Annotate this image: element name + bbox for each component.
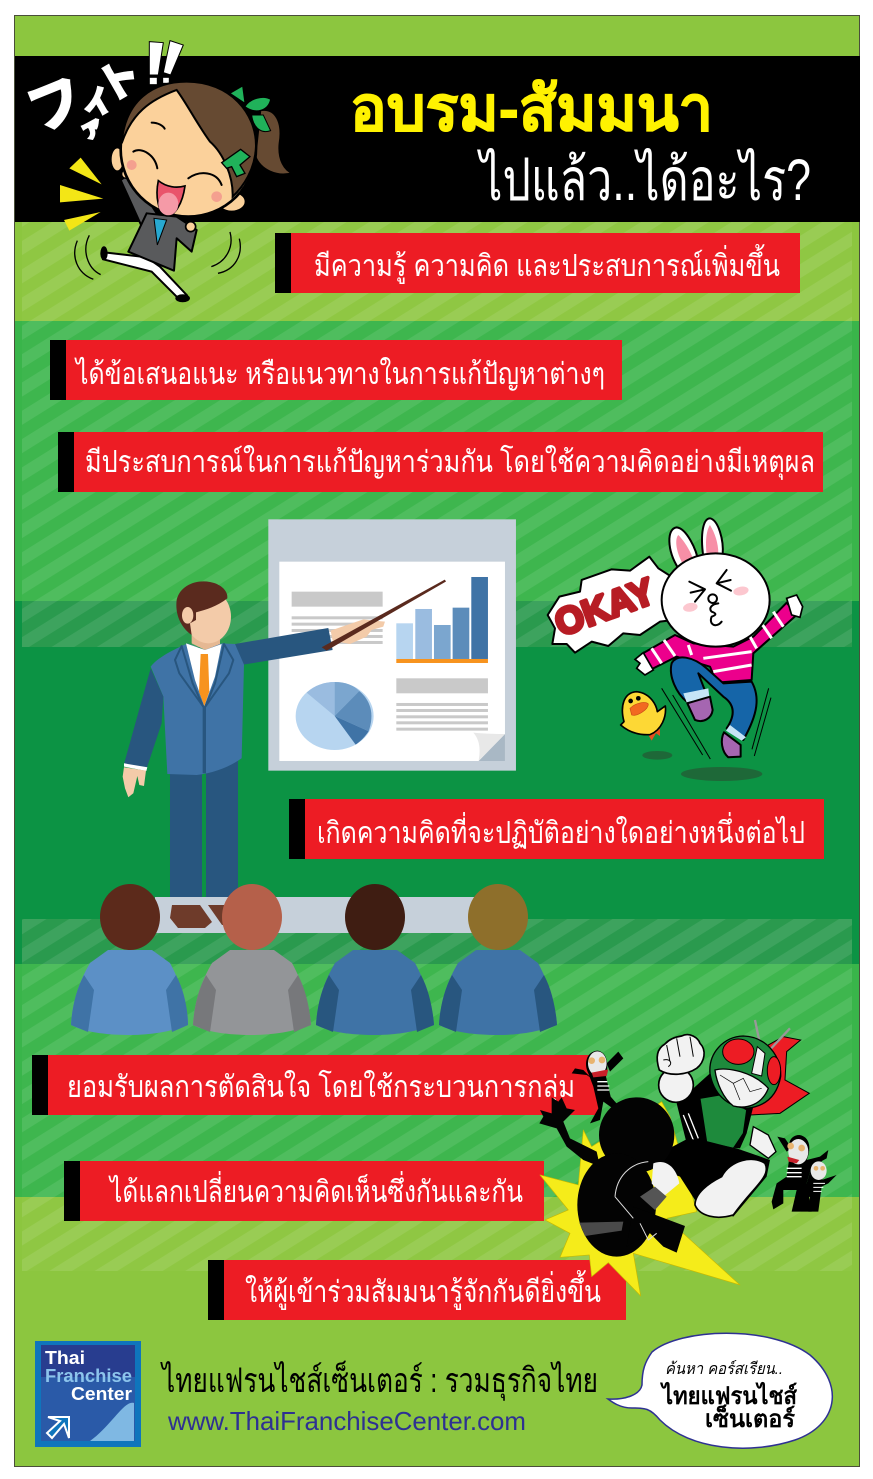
presenter shoes [170, 905, 236, 928]
henchmen right [772, 1135, 837, 1212]
katakana shout: イ [72, 75, 120, 128]
page curl [479, 734, 505, 761]
pie chart [296, 682, 374, 750]
speech bubble: ค้นหา คอร์สเรียน.. [665, 1359, 783, 1378]
footer website: www.ThaiFranchiseCenter.com [167, 1406, 526, 1436]
okay bubble [548, 557, 677, 653]
face [133, 123, 222, 185]
right text lines [396, 678, 488, 731]
helmet [710, 1036, 781, 1108]
illustration: cheering girl [13, 41, 293, 302]
stage and audience [71, 884, 557, 1035]
hair bow [230, 86, 271, 132]
bunny face [689, 570, 731, 625]
board frame [268, 519, 516, 771]
yellow chick [621, 692, 666, 741]
audience member 4 [439, 884, 557, 1035]
speech bubble: เซ็นเตอร์ [705, 1404, 795, 1433]
hero kick fight scene [539, 1020, 837, 1296]
enemy details [579, 1162, 679, 1240]
presenter body [151, 643, 244, 775]
kicking hero [653, 1020, 809, 1217]
presenter head [192, 630, 220, 650]
footer logo: Center [71, 1384, 132, 1404]
board sheet [279, 562, 505, 761]
left text lines [292, 592, 383, 644]
speech bubble: ไทยแฟรนไชส์ [659, 1381, 797, 1410]
small henchman top [572, 1051, 623, 1123]
legs [653, 1138, 770, 1217]
red scarf [723, 1037, 809, 1115]
footer logo: Franchise [45, 1366, 132, 1386]
bunny head [662, 553, 770, 647]
exclamation marks [149, 41, 183, 85]
katakana shout: ト [84, 41, 150, 114]
banner 6: ได้แลกเปลี่ยนความคิดเห็นซึ่งกันและกัน [108, 1171, 523, 1209]
motion arcs [75, 232, 240, 279]
arms and sweater [642, 603, 797, 683]
torso [677, 1073, 753, 1148]
ponytail [255, 110, 293, 175]
banner 1 [275, 233, 800, 293]
banner 5: ยอมรับผลการตัดสินใจ โดยใช้กระบวนการกลุ่ม [67, 1069, 575, 1106]
katakana shout: ァ [72, 105, 109, 146]
audience member 2 [193, 884, 311, 1035]
title: อบรม-สัมมนา [350, 75, 713, 144]
burst lines [60, 158, 103, 231]
audience member 3 [316, 884, 434, 1035]
okay lettering: OKAY [549, 570, 660, 644]
okay bunny [548, 518, 803, 781]
banner 4 [289, 799, 824, 859]
banner 5 [32, 1055, 600, 1115]
jeans [671, 657, 757, 740]
jacket [128, 213, 197, 271]
presenter legs [170, 757, 238, 903]
black silhouette enemy [539, 1097, 685, 1257]
pointing arm [235, 628, 333, 665]
speech bubble [608, 1333, 832, 1448]
motion lines [662, 688, 771, 759]
impact star [540, 1102, 740, 1296]
antennae [755, 1020, 790, 1057]
banner 6 [64, 1161, 544, 1221]
banner 2: ได้ข้อเสนอแนะ หรือแนวทางในการแก้ปัญหาต่างๆ [74, 356, 605, 391]
raised arm [121, 173, 157, 230]
banner 2 [50, 340, 622, 400]
banner 7: ให้ผู้เข้าร่วมสัมมนารู้จักกันดียิ่งขึ้น [245, 1270, 601, 1310]
shadows [681, 767, 762, 781]
banner 7 [208, 1260, 626, 1320]
footer company name: ไทยแฟรนไชส์เซ็นเตอร์ : รวมธุรกิจไทย [160, 1360, 598, 1401]
banner 1: มีความรู้ ความคิด และประสบการณ์เพิ่มขึ้น [314, 244, 780, 284]
glove right [750, 1127, 776, 1158]
katakana shout [13, 41, 150, 147]
legs [103, 253, 187, 298]
bar chart [396, 577, 488, 663]
hair [122, 82, 256, 197]
mouth [157, 181, 185, 216]
banner 3 [58, 432, 823, 492]
gloves [635, 653, 653, 675]
sneakers [687, 697, 713, 721]
head [121, 81, 256, 217]
audience member 1 [71, 884, 188, 1035]
cheeks [127, 160, 137, 170]
katakana shout: フ [13, 53, 94, 147]
ears [669, 518, 723, 568]
hair clip [222, 149, 250, 177]
presentation board and presenter [123, 519, 516, 903]
stage [155, 897, 475, 933]
fist [659, 1068, 693, 1102]
footer logo [35, 1341, 141, 1447]
title [350, 75, 811, 213]
ear [218, 192, 246, 212]
footer logo: Thai [45, 1348, 85, 1368]
header band [15, 56, 860, 222]
